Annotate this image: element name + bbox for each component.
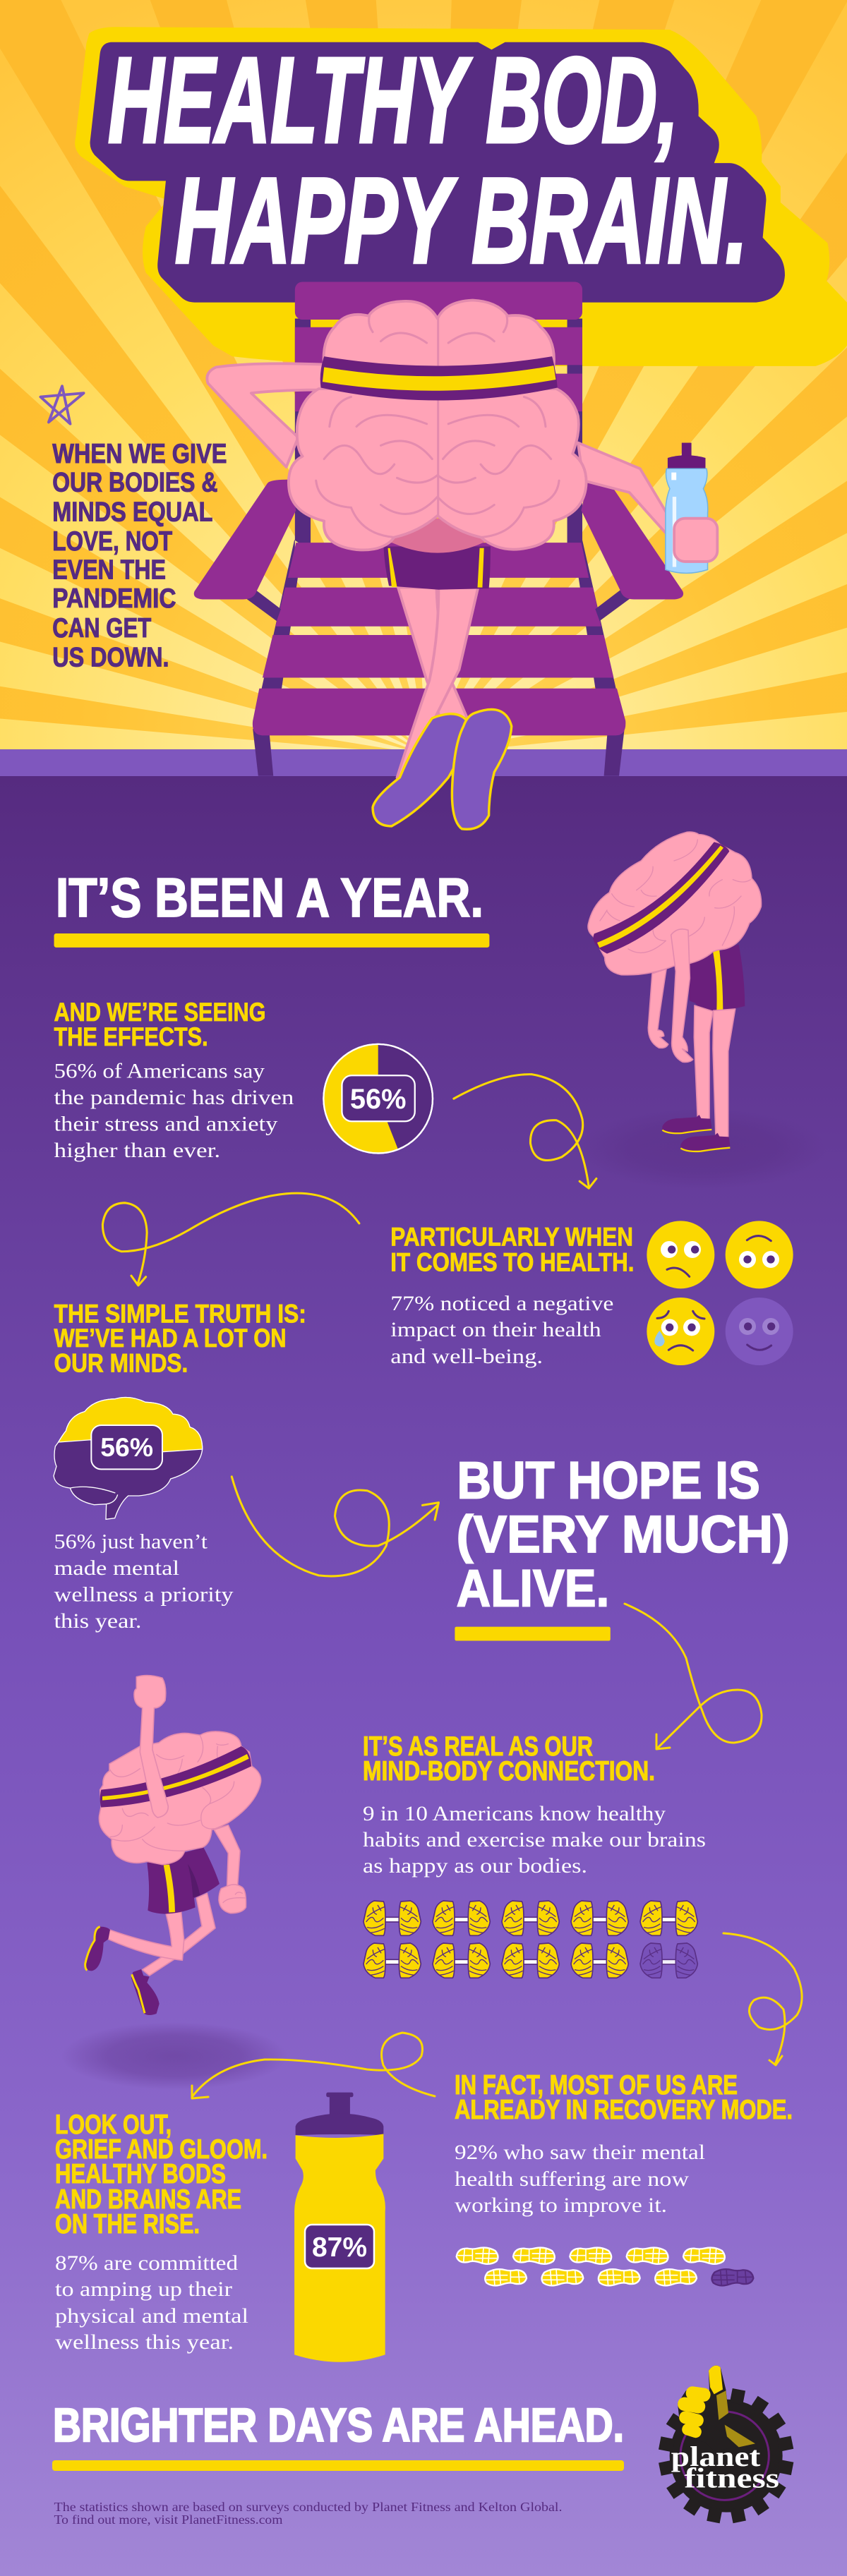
right arm <box>578 443 670 535</box>
text: recovery mode: IN FACT, MOST OF US ARE <box>455 2070 738 2100</box>
emoji: worried <box>647 1221 714 1288</box>
side text: WHEN WE GIVE <box>52 439 227 469</box>
text: look out: to amping up their <box>55 2278 232 2301</box>
arrow <box>232 1477 438 1576</box>
text: look out <box>55 2110 268 2354</box>
text: particularly health <box>390 1222 634 1368</box>
icons: emoji faces <box>647 1221 793 1365</box>
side text: EVEN THE <box>52 555 166 585</box>
logo: planet fitness: planet <box>671 2441 761 2472</box>
text: simple truth <box>54 1300 306 1377</box>
text: recovery mode: 92% who saw their mental <box>455 2141 705 2164</box>
logo: planet fitness: fitness <box>684 2462 779 2494</box>
text: mental wellness <box>54 1530 234 1633</box>
heading: it's been a year <box>54 866 489 948</box>
text: recovery mode <box>455 2070 793 2217</box>
heading: it's been a year: IT’S BEEN A YEAR. <box>56 866 483 929</box>
middle section <box>54 866 827 1641</box>
thumbs-up hand <box>677 2366 755 2450</box>
background: purple gradient lower section <box>0 776 847 2576</box>
side text <box>52 439 227 672</box>
heading: but hope is very much alive: BUT HOPE IS <box>457 1451 760 1509</box>
arrow <box>625 1604 762 1749</box>
emoji: crying <box>647 1298 714 1365</box>
legs <box>397 588 478 783</box>
title <box>108 32 747 289</box>
yellow backdrop behind title <box>75 27 847 366</box>
background: sunburst sky <box>0 0 847 801</box>
shadow under slouching figure <box>578 1108 827 1190</box>
text: mental wellness: wellness a priority <box>54 1583 234 1607</box>
icon: water bottle <box>666 443 717 573</box>
shoes <box>373 709 512 829</box>
side text: CAN GET <box>52 613 151 643</box>
text: look out: GRIEF AND GLOOM. <box>55 2134 268 2165</box>
text: mind-body connection: IT’S AS REAL AS OUR <box>363 1731 593 1762</box>
icons: brain dumbbells <box>364 1901 697 1978</box>
arrow <box>723 1933 802 2065</box>
hero illustration and title <box>40 27 847 829</box>
side text: PANDEMIC <box>52 583 176 614</box>
text: seeing the effects <box>54 998 294 1162</box>
text: seeing the effects: 56% of Americans say <box>54 1059 265 1082</box>
gear <box>659 2388 793 2523</box>
text: simple truth: OUR MINDS. <box>54 1348 188 1377</box>
shorts <box>383 546 491 590</box>
closing heading: BRIGHTER DAYS ARE AHEAD. <box>53 2399 624 2452</box>
text: recovery mode: health suffering are now <box>455 2167 689 2191</box>
hero brain <box>289 301 587 553</box>
text: particularly health: impact on their health <box>390 1318 601 1341</box>
heading: but hope is very much alive <box>455 1451 790 1641</box>
footnote: To find out more, visit PlanetFitness.com <box>54 2512 282 2527</box>
footnote: The statistics shown are based on surveys conducted by Planet Fitness and Kelton Global. <box>54 2500 562 2514</box>
text: look out: 87% are committed <box>55 2251 238 2275</box>
headband <box>320 356 558 400</box>
text: seeing the effects: their stress and anxiety <box>54 1112 277 1135</box>
text: simple truth: WE’VE HAD A LOT ON <box>54 1324 287 1353</box>
text: particularly health: PARTICULARLY WHEN <box>390 1222 633 1251</box>
text: seeing the effects: the pandemic has driven <box>54 1086 294 1109</box>
jumping brain figure <box>85 1676 261 2015</box>
text: look out: physical and mental <box>55 2304 248 2328</box>
left arm behind head <box>207 363 324 467</box>
side text: MINDS EQUAL <box>52 497 213 528</box>
pie chart 56%: 56% <box>350 1084 407 1115</box>
text: particularly health: 77% noticed a negative <box>390 1292 613 1315</box>
text: look out: ON THE RISE. <box>55 2209 200 2239</box>
text: seeing the effects: THE EFFECTS. <box>54 1022 208 1051</box>
text: particularly health: IT COMES TO HEALTH. <box>390 1247 634 1276</box>
logo: planet fitness <box>659 2366 793 2523</box>
purple title panel <box>90 42 785 303</box>
heading: but hope is very much alive: ALIVE. <box>457 1559 609 1618</box>
text: look out: LOOK OUT, <box>55 2110 172 2140</box>
text: seeing the effects: AND WE’RE SEEING <box>54 998 266 1027</box>
side text: US DOWN. <box>52 642 169 672</box>
arrow <box>102 1193 359 1286</box>
chair <box>194 282 683 776</box>
heading: but hope is very much alive: (VERY MUCH) <box>457 1505 790 1564</box>
icon: yellow bottle 87% <box>294 2093 385 2362</box>
text: look out: HEALTHY BODS <box>55 2159 226 2189</box>
icon: yellow bottle 87%: 87% <box>312 2232 367 2263</box>
text: mind-body connection <box>363 1731 706 1877</box>
text: mind-body connection: MIND-BODY CONNECTION. <box>363 1756 655 1786</box>
text: particularly health: and well-being. <box>390 1345 543 1368</box>
side text: LOVE, NOT <box>52 526 172 557</box>
pie chart 56% <box>323 1044 433 1153</box>
brain graphic 56% <box>54 1398 203 1519</box>
text: mind-body connection: 9 in 10 Americans know healthy <box>363 1802 666 1825</box>
arrow <box>454 1075 596 1188</box>
text: simple truth: THE SIMPLE TRUTH IS: <box>54 1300 306 1329</box>
text: mental wellness: 56% just haven’t <box>54 1530 208 1554</box>
text: mental wellness: made mental <box>54 1556 179 1580</box>
icons: shoe prints <box>457 2247 753 2286</box>
text: mind-body connection: habits and exercise make our brains <box>363 1828 706 1851</box>
arrow <box>192 2033 435 2098</box>
slouching brain figure <box>588 832 761 1152</box>
text: look out: AND BRAINS ARE <box>55 2184 241 2215</box>
text: mental wellness: this year. <box>54 1609 142 1633</box>
text: recovery mode: working to improve it. <box>455 2194 667 2217</box>
icon: star <box>40 386 84 424</box>
text: seeing the effects: higher than ever. <box>54 1139 220 1162</box>
emoji: happy muted <box>726 1298 793 1365</box>
brain graphic 56%: 56% <box>100 1432 153 1462</box>
text: mind-body connection: as happy as our bodies. <box>363 1854 587 1877</box>
footnote <box>54 2500 562 2527</box>
side text: OUR BODIES & <box>52 467 217 497</box>
closing heading <box>52 2399 624 2471</box>
text: look out: wellness this year. <box>55 2330 234 2354</box>
emoji: no mouth <box>726 1221 793 1288</box>
jumping brain shadow <box>61 2022 287 2090</box>
